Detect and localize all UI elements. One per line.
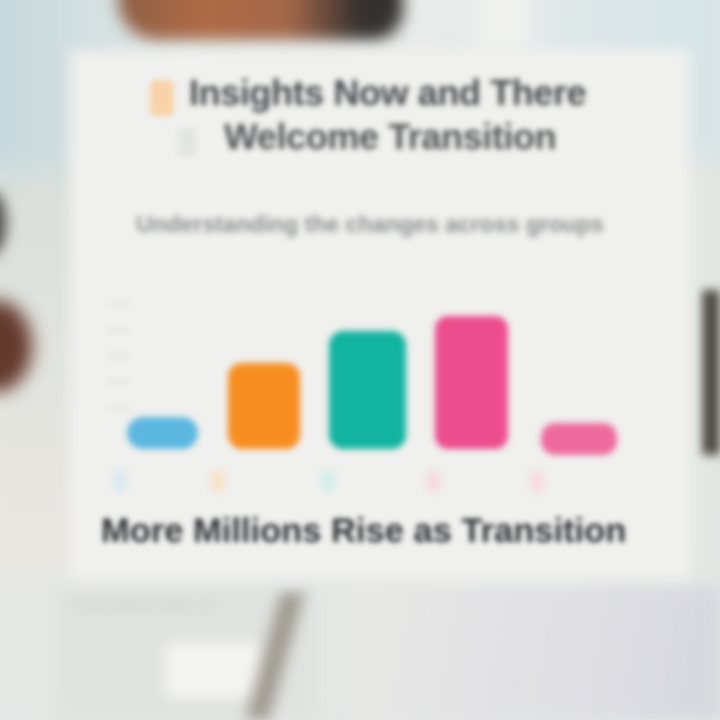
subtitle: Understanding the changes across groups: [136, 211, 604, 237]
panel: poster: [70, 50, 690, 580]
legend row: [112, 468, 545, 494]
icon: grey mark: [178, 128, 196, 156]
legend: blue: [114, 471, 126, 491]
bottom paper left: [60, 588, 315, 720]
legend: pink: [428, 471, 440, 491]
bar: orange: [228, 363, 300, 449]
axis labels: [108, 300, 130, 420]
bar: blue: [127, 417, 198, 449]
paper highlight: [165, 643, 260, 698]
legend: small pink: [531, 471, 543, 491]
legend: teal: [322, 471, 334, 491]
bottom paper right: [350, 585, 720, 720]
right dark object: [702, 290, 720, 455]
title line two: Welcome Transition: [224, 116, 556, 157]
bar: pink: [435, 316, 508, 449]
title: [146, 72, 590, 157]
bottom heading: More Millions Rise as Transition: [101, 512, 626, 550]
left brown object: [0, 300, 32, 392]
bar chart: [122, 311, 622, 460]
icon: orange mark: [150, 80, 174, 116]
left dark object: [0, 190, 6, 256]
top brown object: [118, 0, 403, 40]
legend: orange: [212, 471, 224, 491]
poster content: [99, 72, 628, 550]
bar: teal: [329, 331, 406, 449]
bar: small pink: [541, 423, 617, 455]
title line one: Insights Now and There: [189, 72, 586, 113]
paper text: Lorem ipsum dolor sit: [70, 596, 213, 613]
paper shadow stroke: [245, 592, 305, 720]
